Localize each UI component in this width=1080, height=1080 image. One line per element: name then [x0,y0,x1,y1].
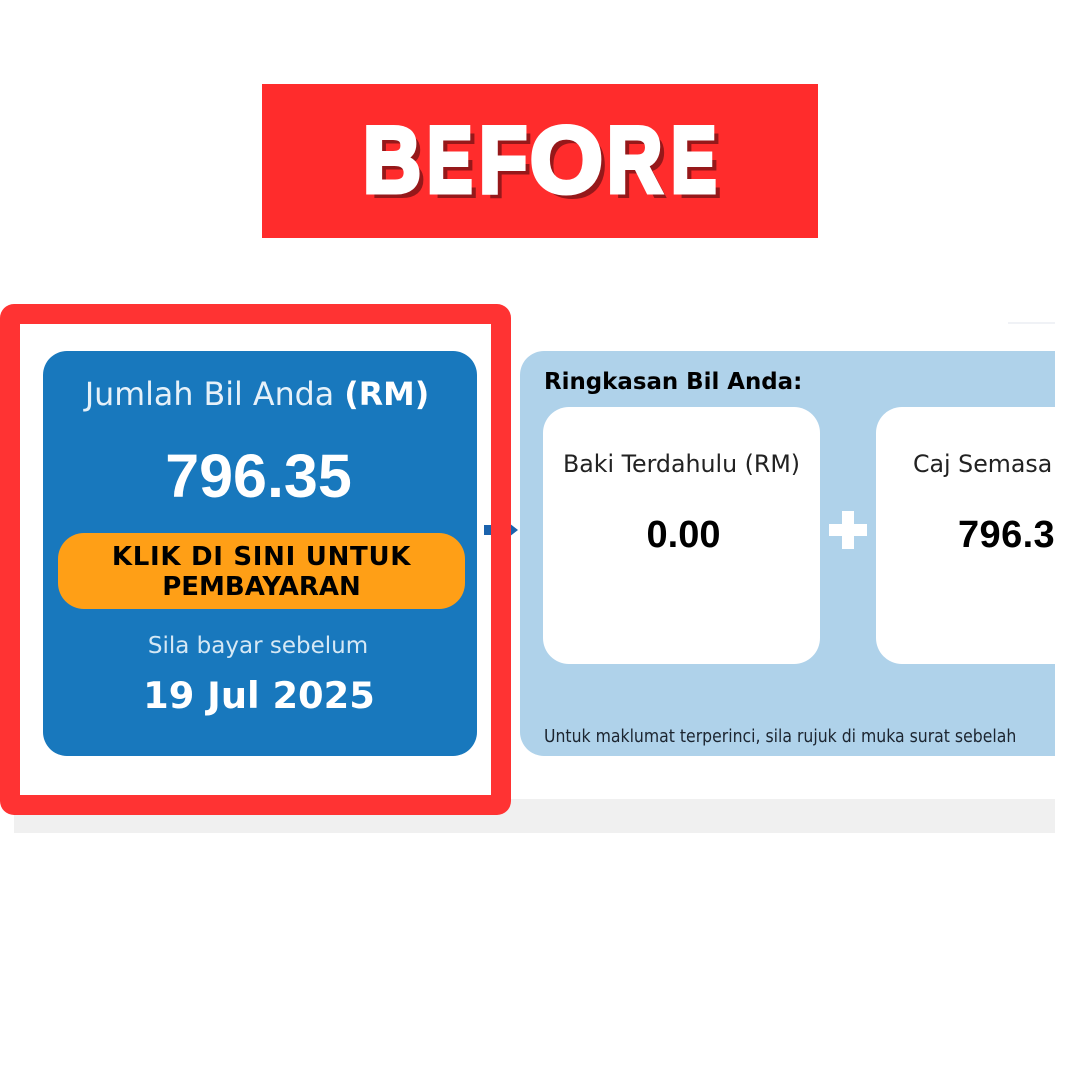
previous balance value: 0.00 [647,514,720,556]
heading text: O [530,107,603,212]
heading text: E [671,107,716,212]
bottom grey strip [14,799,1055,833]
card: current charges [876,407,1080,664]
right white mask [1055,300,1080,860]
total bill label: Jumlah Bil Anda (RM) [85,377,429,413]
total bill amount: 796.35 [165,442,352,510]
due date label: Sila bayar sebelum [148,633,368,659]
footnote: Untuk maklumat terperinci, sila rujuk di muka surat sebelah [544,727,1016,747]
payment button text [112,542,412,602]
heading text: E [427,107,472,212]
icon: arrow [484,524,518,536]
due date: 19 Jul 2025 [143,674,375,717]
heading banner: BEFORE [262,84,818,238]
payment button text: PEMBAYARAN [162,572,361,602]
heading text: B [363,107,421,212]
payment button [58,533,465,609]
panel: total bill [43,351,477,756]
previous balance label: Baki Terdahulu (RM) [563,450,800,478]
heading text [363,107,720,212]
icon: plus [829,511,867,549]
card: previous balance [543,407,820,664]
summary heading: Ringkasan Bil Anda: [544,369,802,395]
panel: total bill highlight frame [0,304,511,815]
heading text: F [479,107,527,212]
panel: bill summary [520,351,1055,756]
payment button text: KLIK DI SINI UNTUK [112,542,411,572]
heading text: R [607,107,663,212]
faint clipped text fragment [1008,322,1055,324]
